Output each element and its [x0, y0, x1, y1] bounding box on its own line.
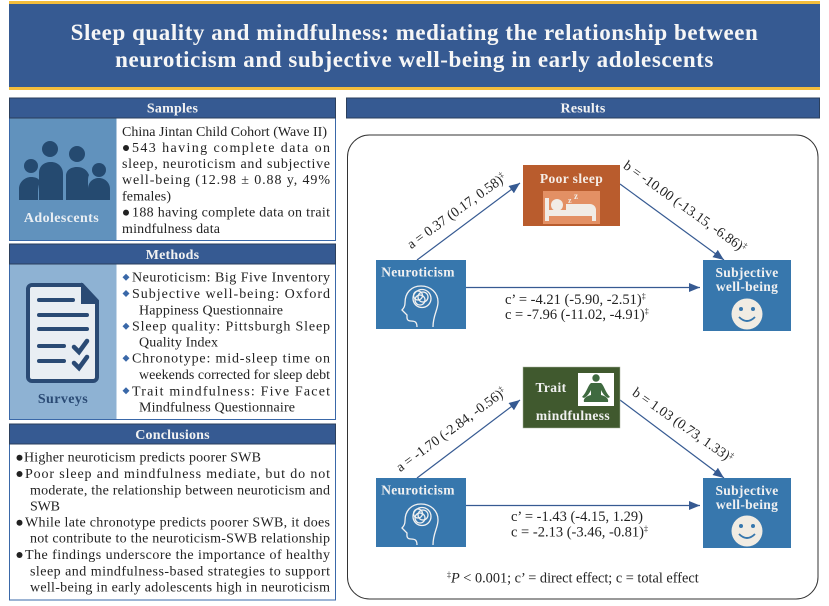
samples text: well-being (12.98 ± 0.88 y, 49%: [122, 173, 330, 188]
label: path b, poor sleep: ‡: [741, 241, 749, 251]
conclusions text: Poor sleep and mindfulness mediate, but do not: [25, 467, 330, 482]
label: direct and total effect, upper: ‡: [642, 292, 646, 301]
box: neuroticism upper: Neuroticism: [381, 264, 455, 280]
samples text: 543 having complete data on: [132, 141, 330, 156]
icon: smiley: [732, 298, 762, 330]
icon: meditation figure: [582, 374, 610, 402]
icon: smiley: [732, 516, 762, 546]
label: direct and total effect, lower: ‡: [644, 525, 648, 534]
conclusions text: SWB: [30, 500, 60, 515]
conclusions heading: Conclusions: [135, 428, 210, 443]
arrow: neuroticism to well-being direct, lower: [466, 504, 700, 506]
arrow: neuroticism to poor sleep: [417, 183, 520, 260]
methods heading: Methods: [146, 248, 200, 263]
adolescents label: Adolescents: [24, 211, 99, 226]
panel: methods: [9, 244, 336, 420]
label: direct and total effect, upper: [505, 292, 649, 323]
arrow: neuroticism to mindfulness: [417, 400, 520, 478]
box: subjective well-being upper: well-being: [716, 279, 778, 294]
box: subjective well-being lower: well-being: [716, 497, 778, 512]
box: subjective well-being lower: Subjective: [716, 483, 778, 498]
title banner: [9, 1, 820, 90]
label: path b, mindfulness: ‡: [728, 451, 736, 460]
methods text: Subjective well-being: Oxford: [132, 287, 330, 302]
samples text: mindfulness data: [122, 222, 221, 237]
samples text: China Jintan Child Cohort (Wave II): [122, 125, 327, 140]
box: poor sleep: [523, 165, 620, 226]
label: direct and total effect, upper: c’ = -4.21 (-5.90, -2.51): [505, 292, 642, 308]
methods text: Chronotype: mid-sleep time on: [132, 352, 330, 367]
methods text: Quality Index: [139, 336, 218, 351]
samples text: 188 having complete data on trait: [132, 206, 330, 221]
results heading: [346, 98, 820, 118]
box: neuroticism lower: Neuroticism: [381, 482, 455, 498]
methods text: Neuroticism: Big Five Inventory: [132, 271, 330, 286]
label: direct and total effect, upper: c = -7.96 (-11.02, -4.91): [505, 307, 645, 323]
samples text: females): [122, 189, 171, 204]
methods text: weekends corrected for sleep debt: [139, 368, 330, 383]
box: subjective well-being lower: [703, 478, 791, 548]
samples text: sleep, neuroticism and subjective: [122, 157, 330, 172]
icon: survey checklist: [28, 285, 97, 381]
panel: samples: [9, 98, 336, 241]
conclusions text: [16, 451, 330, 595]
label: direct and total effect, lower: c = -2.13 (-3.46, -0.81): [511, 525, 644, 541]
samples icon column: [10, 118, 116, 240]
box: neuroticism lower: [376, 478, 466, 547]
box: subjective well-being upper: [703, 260, 791, 331]
methods icon column: [10, 264, 116, 419]
surveys label: Surveys: [38, 392, 88, 407]
title banner: Sleep quality and mindfulness: mediating the relationship between: [71, 20, 758, 45]
samples heading: [10, 98, 336, 118]
conclusions text: While late chronotype predicts poorer SWB, it does: [25, 516, 330, 531]
conclusions text: sleep and mindfulness-based strategies to support: [30, 564, 330, 579]
label: path b, mindfulness: b = 1.03 (0.73, 1.33): [629, 385, 732, 464]
samples heading: Samples: [147, 102, 198, 117]
label: path a, mindfulness: a = -1.70 (-2.84, -0.56): [394, 387, 506, 476]
results heading: Results: [561, 102, 606, 117]
conclusions text: not contribute to the neuroticism-SWB relationship: [30, 532, 330, 547]
panel: results diagram: [347, 134, 818, 600]
title banner: neuroticism and subjective well-being in early adolescents: [115, 47, 714, 72]
box: subjective well-being upper: Subjective: [716, 265, 778, 280]
conclusions text: Higher neuroticism predicts poorer SWB: [24, 451, 261, 466]
box: poor sleep: Poor sleep: [540, 171, 603, 186]
icon: bed: [545, 191, 596, 221]
footnote: < 0.001; c’ = direct effect; c = total effect: [463, 571, 699, 587]
icon: bed: z: [574, 191, 578, 201]
label: path b, poor sleep: b = -10.00 (-13.15, -6.86): [620, 159, 745, 254]
arrow: mindfulness to well-being: [620, 400, 724, 478]
footnote: P: [450, 571, 460, 587]
conclusions text: moderate, the relationship between neuroticism and: [30, 484, 330, 499]
arrow: poor sleep to well-being: [620, 184, 724, 260]
label: direct and total effect, lower: c’ = -1.43 (-4.15, 1.29): [511, 509, 643, 525]
conclusions text: well-being in early adolescents high in neuroticism: [30, 580, 330, 595]
box: trait mindfulness: mindfulness: [536, 408, 610, 423]
conclusions heading: [10, 424, 336, 444]
methods text: Sleep quality: Pittsburgh Sleep: [132, 320, 330, 335]
methods heading: [10, 244, 336, 264]
icon: head with brain: [402, 504, 438, 545]
icon: bed: z: [568, 196, 572, 205]
label: path a, mindfulness: ‡: [497, 384, 505, 394]
box: trait mindfulness: Trait: [536, 380, 567, 395]
label: direct and total effect, upper: ‡: [645, 307, 649, 316]
methods text: Mindfulness Questionnaire: [139, 400, 295, 415]
label: direct and total effect, lower: [511, 509, 648, 541]
methods text: Happiness Questionnaire: [139, 304, 283, 319]
panel: conclusions: [9, 424, 336, 600]
label: path a, poor sleep: ‡: [497, 170, 505, 180]
icon: group of adolescents: [19, 141, 110, 200]
footnote: ‡: [447, 571, 451, 580]
box: trait mindfulness: [523, 367, 620, 428]
methods text: Trait mindfulness: Five Facet: [132, 384, 330, 399]
conclusions text: The findings underscore the importance of healthy: [25, 548, 330, 563]
label: path a, poor sleep: a = 0.37 (0.17, 0.58): [405, 173, 506, 253]
arrow: neuroticism to well-being direct: [466, 286, 700, 288]
icon: head with brain: [402, 286, 438, 327]
methods text: [122, 271, 330, 415]
samples text: [122, 125, 330, 237]
box: neuroticism upper: [376, 260, 466, 329]
